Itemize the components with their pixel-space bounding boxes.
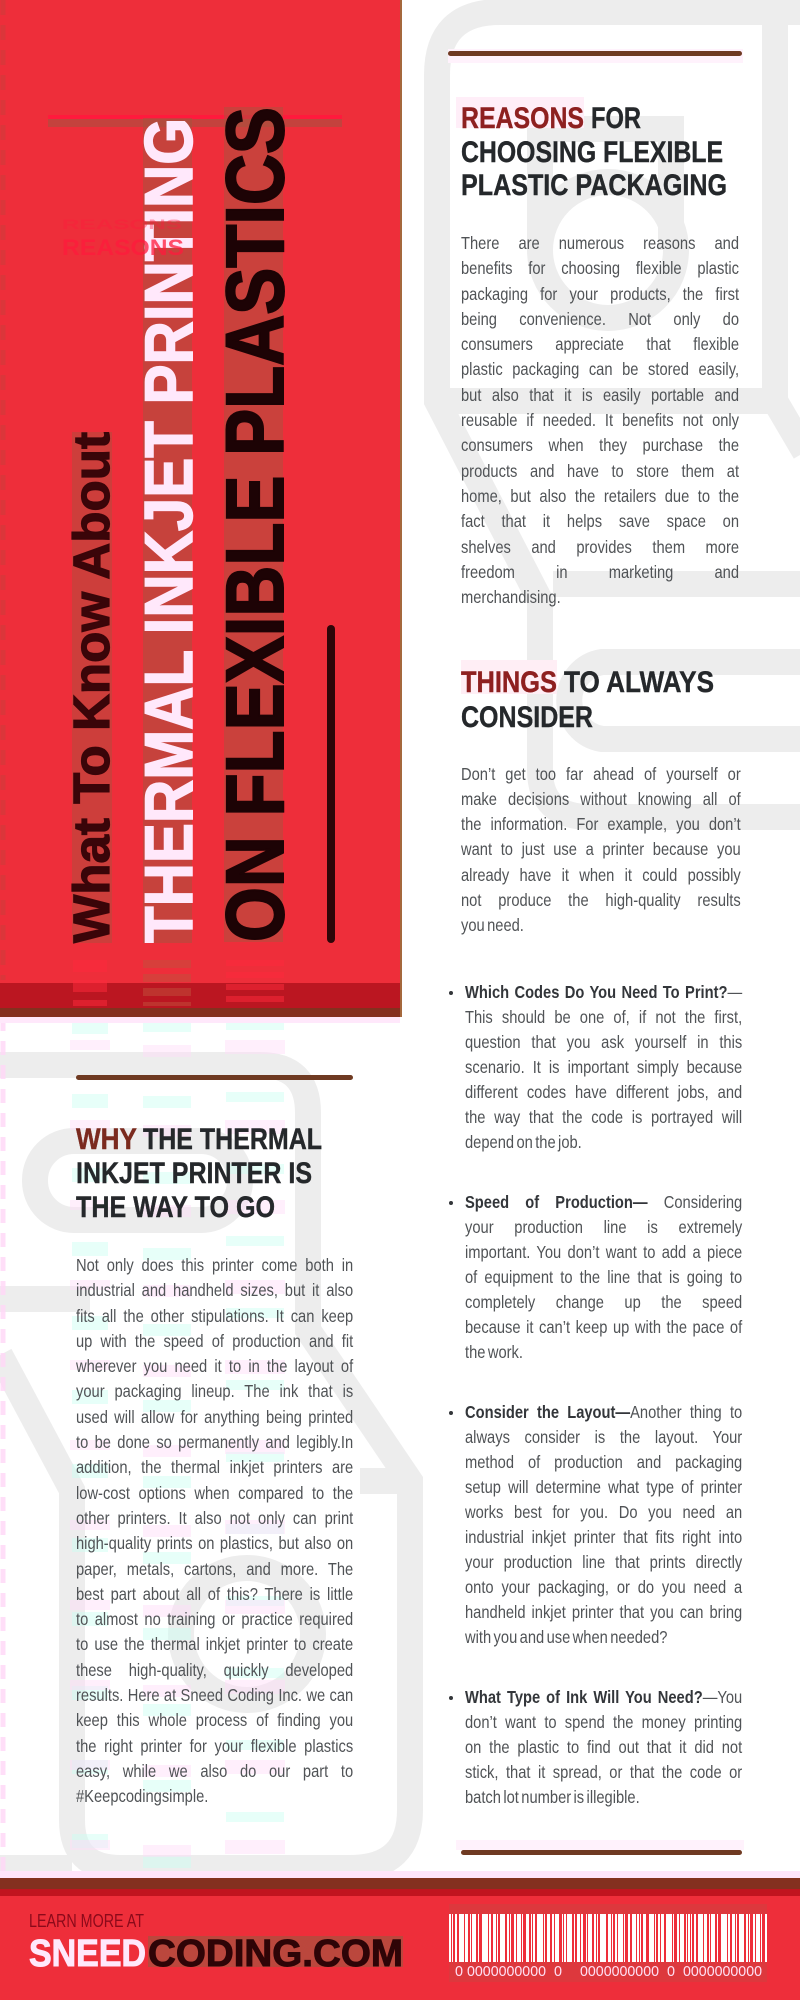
barcode: 0000000000 [467, 1963, 546, 1980]
bullet: which codes: Which Codes Do You Need To Print?— [465, 982, 742, 1002]
bullet: speed of production: your production line is extremely [465, 1216, 742, 1236]
text block: reasons body: shelves and provides them more [461, 537, 739, 557]
heading: things to always consider: TO ALWAYS [564, 666, 714, 699]
text block: why body: fits all the other stipulations. It can keep [76, 1306, 353, 1326]
bullet: consider the layout: with you and use when needed? [465, 1626, 667, 1646]
ghost text: reasons: REASONS [62, 216, 182, 232]
text block: why body: to use the thermal inkjet printer to create [76, 1634, 353, 1654]
text block: reasons body: being convenience. Not only do [461, 309, 739, 329]
bullet: which codes [465, 982, 742, 1152]
text block: why body: to be done so permanently and legibly.In [76, 1432, 353, 1452]
text block: things body: you need. [461, 915, 524, 935]
text block: reasons body: There are numerous reasons and [461, 233, 739, 253]
barcode digits: 0 [455, 1963, 463, 1980]
ghost text: reasons [62, 216, 184, 260]
text block: why body: #Keepcodingsimple. [76, 1786, 208, 1806]
bullet: speed of production: the work. [465, 1342, 523, 1362]
bullet: consider the layout: setup will determine what type of printer [465, 1476, 742, 1496]
bullet: what type of ink: don’t want to spend the money printing [465, 1712, 742, 1732]
title: on flexible plastics: ON FLEXIBLE PLASTICS [210, 107, 301, 942]
text block: reasons body: home, but also the retailers due to the [461, 486, 739, 506]
bullet: which codes: different codes have different jobs, and [465, 1082, 742, 1102]
heading: why the thermal inkjet printer is the way to go: THE THERMAL [143, 1123, 322, 1156]
heading: reasons for choosing flexible plastic packaging: FOR [591, 102, 641, 135]
barcode [449, 1904, 767, 1982]
heading: why the thermal inkjet printer is the way to go: INKJET PRINTER IS [76, 1157, 312, 1190]
text block: why body: Not only does this printer come both in [76, 1255, 353, 1275]
text block: why body: to almost no training or practice required [76, 1609, 353, 1629]
bullet: speed of production: Speed of Production— Considering [465, 1192, 742, 1212]
bullet: what type of ink [465, 1686, 742, 1806]
heading: things to always consider: THINGS [461, 666, 557, 699]
footer: website: CODING.COM [148, 1933, 403, 1975]
heading: why the thermal inkjet printer is the way to go: THE WAY TO GO [76, 1191, 275, 1224]
divider: right column bottom [461, 1850, 742, 1855]
barcode: 0000000000 [580, 1963, 659, 1980]
text block: why body: up with the speed of production and fit [76, 1331, 353, 1351]
bullet: what type of ink: stick, that it spread, or that the code or [465, 1762, 742, 1782]
bullet: speed of production: of equipment to the line that is going to [465, 1266, 742, 1286]
text block: reasons body: benefits for choosing flexible plastic [461, 258, 739, 278]
text block: reasons body: merchandising. [461, 587, 561, 607]
bullet: what type of ink: batch lot number is illegible. [465, 1786, 640, 1806]
text block: things body: make decisions without knowing all of [461, 789, 741, 809]
footer: website: SNEED [29, 1933, 146, 1975]
text block: reasons body: consumers appreciate that flexible [461, 334, 739, 354]
text block: why body: used will allow for anything being printed [76, 1407, 353, 1427]
heading: reasons for choosing flexible plastic packaging: CHOOSING FLEXIBLE [461, 136, 723, 169]
text block: why body: results. Here at Sneed Coding Inc. we can [76, 1685, 353, 1705]
heading: reasons for choosing flexible plastic packaging: REASONS [461, 102, 584, 135]
text block: things body: Don’t get too far ahead of yourself or [461, 764, 741, 784]
text block: things body: want to just use a printer because you [461, 839, 741, 859]
text block: why body: keep this whole process of finding you [76, 1710, 353, 1730]
text block: why body: easy, while we also do our part to [76, 1761, 353, 1781]
text block: reasons body: reusable if needed. It benefits not only [461, 410, 739, 430]
bullet: consider the layout: works best for you. Do you need an [465, 1502, 742, 1522]
text block: reasons body: products and have to store them at [461, 461, 739, 481]
footer: website [29, 1933, 403, 1975]
heading: reasons for choosing flexible plastic packaging [461, 102, 727, 202]
bullet: speed of production [465, 1192, 742, 1362]
panel: footer [0, 1878, 800, 2000]
text block: reasons body: fact that it helps save space on [461, 511, 739, 531]
text block: why body: paper, metals, cartons, and more. The [76, 1559, 353, 1579]
heading: why the thermal inkjet printer is the way to go [76, 1123, 322, 1224]
text block: reasons body: but also that it is easily portable and [461, 385, 739, 405]
text block: why body: the right printer for your flexible plastics [76, 1736, 353, 1756]
text block: why body: other printers. It also not only can print [76, 1508, 353, 1528]
heading: why the thermal inkjet printer is the way to go: WHY [76, 1123, 137, 1156]
bullet: consider the layout: always consider is the layout. Your [465, 1426, 742, 1446]
heading: things to always consider: CONSIDER [461, 701, 593, 734]
title: what to know about: What To Know About [63, 432, 120, 943]
text block: reasons body: packaging for your products, the first [461, 284, 739, 304]
bullet: which codes: question that you ask yourself in this [465, 1032, 742, 1052]
bullet: which codes: the way that the code is portrayed will [465, 1106, 742, 1126]
divider: why section top [76, 1075, 353, 1080]
text block: why body: high-quality prints on plastics, but also on [76, 1533, 353, 1553]
title: thermal inkjet printing: THERMAL INKJET PRINTING [131, 118, 207, 943]
text block: things body: not produce the high-quality results [461, 890, 741, 910]
vertical accent bar [327, 625, 335, 943]
bullet: what type of ink: on the plastic to find out that it did not [465, 1736, 742, 1756]
bullet: consider the layout: method of production and packaging [465, 1452, 742, 1472]
barcode: 0 [667, 1963, 675, 1980]
text block: reasons body: consumers when they purchase the [461, 435, 739, 455]
bullet: consider the layout: industrial inkjet printer that fits right into [465, 1526, 742, 1546]
text block: reasons body [461, 233, 739, 607]
ghost text: reasons: REASONS [62, 235, 184, 260]
text block: things body: already have it when it could possibly [461, 865, 741, 885]
text block: why body: wherever you need it to in the layout of [76, 1356, 353, 1376]
bullet dots [449, 991, 453, 1700]
text block: reasons body: plastic packaging can be stored easily, [461, 359, 739, 379]
text block: why body: addition, the thermal inkjet printers are [76, 1457, 353, 1477]
barcode: 0 [554, 1963, 562, 1980]
text block: why body: industrial and handheld sizes, but it also [76, 1280, 353, 1300]
bullet: what type of ink: What Type of Ink Will You Need?—You [465, 1686, 742, 1706]
bullet: speed of production: completely change up the speed [465, 1292, 742, 1312]
text block: reasons body: freedom in marketing and [461, 562, 739, 582]
bullet: consider the layout: handheld inkjet printer that you can bring [465, 1602, 742, 1622]
divider: reasons top [448, 51, 742, 56]
heading: reasons for choosing flexible plastic packaging: PLASTIC PACKAGING [461, 169, 727, 202]
text block: why body: these high-quality, quickly developed [76, 1660, 353, 1680]
bullet: speed of production: because it can’t keep up with the pace of [465, 1316, 742, 1336]
bullet: which codes: This should be one of, if not the first, [465, 1006, 742, 1026]
barcode: 0000000000 [683, 1963, 762, 1980]
bullet: consider the layout: your production line that prints directly [465, 1552, 742, 1572]
text block: why body: low-cost options when compared to the [76, 1483, 353, 1503]
text block: why body: your packaging lineup. The ink that is [76, 1381, 353, 1401]
bullet: consider the layout [465, 1402, 742, 1646]
bullet: which codes: depend on the job. [465, 1132, 582, 1152]
text block: things body: the information. For example, you don’t [461, 814, 741, 834]
bullet: speed of production: important. You don’t want to add a piece [465, 1242, 742, 1262]
footer: learn more at: LEARN MORE AT [29, 1911, 144, 1931]
text block: why body: best part about all of this? There is little [76, 1584, 353, 1604]
heading: things to always consider [461, 666, 714, 734]
text block: things body [461, 764, 741, 935]
bullet: which codes: scenario. It is important simply because [465, 1056, 742, 1076]
bullet: consider the layout: Consider the Layout—Another thing to [465, 1402, 742, 1422]
text block: why body [76, 1255, 354, 1806]
bullet: consider the layout: onto your packaging, or do you need a [465, 1576, 742, 1596]
